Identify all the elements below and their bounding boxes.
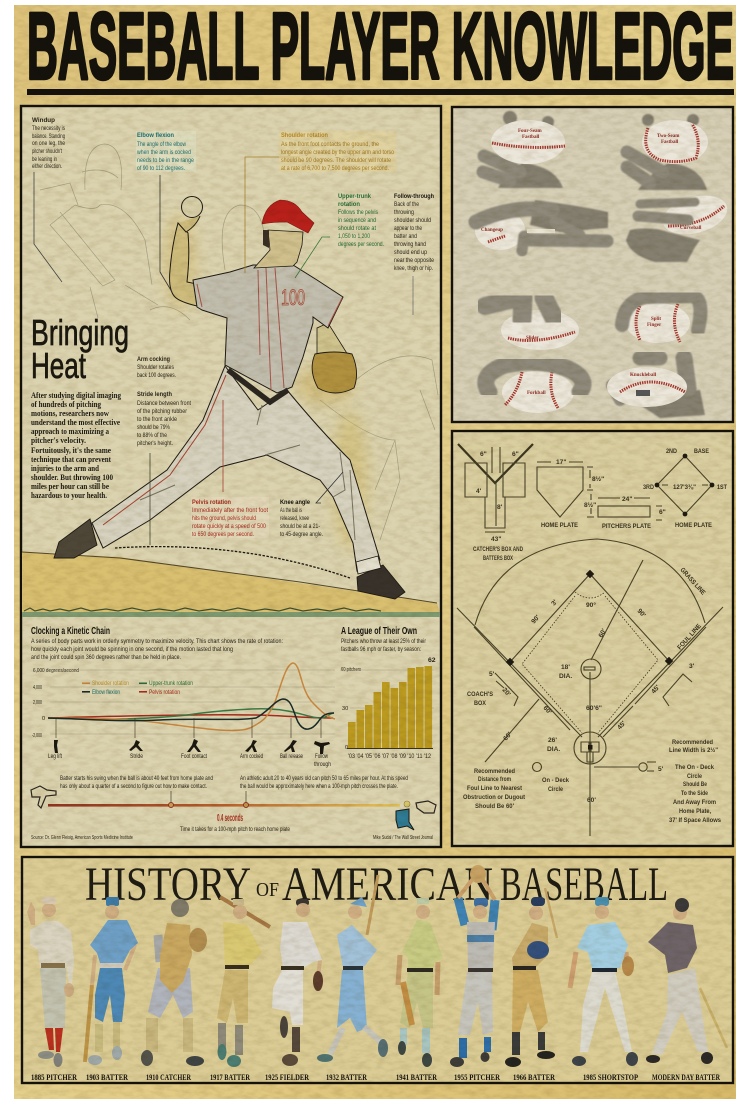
diagram: pitchers plate: 24" <box>622 496 632 503</box>
trouser folds and red stripe <box>103 375 226 525</box>
field labels: DIA. <box>547 746 560 753</box>
text: follow-through: batter and <box>394 233 417 240</box>
text: windup: on one leg, the <box>32 140 65 147</box>
field labels: 60' <box>502 731 514 742</box>
text: stride length: pitcher's height. <box>137 440 173 447</box>
chart heading: kinetic chain: how quickly each joint would be spinning in one second, if the motion lasted that long <box>31 646 233 653</box>
field labels: 90' <box>530 614 542 625</box>
diagram: base diamond <box>643 448 727 529</box>
text: batter timing note: Batter starts his swing when the ball is about 40 feet from home plate and <box>60 775 213 782</box>
foul lines <box>457 607 723 737</box>
shoe right <box>357 565 405 599</box>
grip: splitter: Split <box>651 317 661 322</box>
panel: bringing heat pitcher infographic <box>21 106 441 847</box>
player: 1903 batter <box>85 897 138 1065</box>
text: elbow flexion: of 90 to 112 degrees. <box>137 165 185 172</box>
text: follow-through: near the opposite <box>394 257 434 264</box>
heading: history of American baseball: BASEBALL <box>500 858 668 911</box>
text: follow-through: knee, thigh or hip. <box>394 265 433 272</box>
panel: pitch grip photographs <box>452 107 733 422</box>
grip: knuckleball: Knuckleball <box>630 373 657 378</box>
axis labels: 6,000 degrees/second <box>33 668 79 674</box>
player: 1955 pitcher <box>450 865 495 1067</box>
text: article intro: understand the most effective <box>31 417 120 427</box>
field labels: 60' <box>598 627 608 639</box>
player: 1885 pitcher <box>27 897 74 1067</box>
text: knee angle: released, knee <box>280 515 309 522</box>
player captions: 1903 BATTER <box>86 1073 128 1082</box>
text: knee angle: to 45-degree angle. <box>280 531 323 538</box>
note: on-deck circle: On - Deck <box>542 777 569 784</box>
player: 1925 fielder <box>272 899 323 1066</box>
callout: 0.4 seconds: 0.4 seconds <box>217 813 243 824</box>
text: article intro: approach to maximizing a <box>31 426 110 436</box>
text: elbow flexion: The angle of the elbow <box>137 141 186 148</box>
legend: Shoulder rotation <box>92 680 129 687</box>
back arm with ball <box>170 196 202 306</box>
bar chart: pitchers by season <box>340 657 436 760</box>
field labels: 60'6" <box>586 705 602 712</box>
text: article intro: injuries to the arm and <box>31 463 99 473</box>
diagram: home plate: HOME PLATE <box>541 522 579 529</box>
text: knee angle: should be at a 21- <box>280 523 320 530</box>
text: stride length: Distance between front <box>137 400 191 407</box>
text: stride length: of the pitching rubber <box>137 408 188 415</box>
callout: 0.4 seconds: Time it takes for a 100-mph pitch to reach home plate <box>180 826 290 833</box>
icons: pitching stages <box>54 739 330 754</box>
text: upper-trunk rotation: should rotate at <box>338 225 376 232</box>
bar chart: pitchers by season: 62 <box>428 657 436 664</box>
source credit: Source: Dr. Glenn Fleisig, American Sports Medicine Institute <box>31 835 133 841</box>
chart heading: kinetic chain: Clocking a Kinetic Chain <box>31 625 110 637</box>
field labels: 90' <box>636 608 647 619</box>
heading: history of American baseball: OF <box>256 879 279 901</box>
dashed infield <box>522 592 658 733</box>
text: shoulder rotation: As the front foot contacts the ground, the <box>281 141 379 148</box>
curve: elbow <box>48 699 334 729</box>
field labels: BOX <box>474 700 486 707</box>
text: knee angle: As the ball is <box>280 507 302 514</box>
text: shoulder rotation: Shoulder rotation <box>281 132 328 139</box>
note: recommended distance: Obstruction or Dugout <box>463 794 526 801</box>
text: arm cocking: Shoulder rotates <box>137 364 174 371</box>
field labels: 45' <box>616 720 628 731</box>
grip: four-seam fastball seams view: Two-Seam <box>657 134 680 139</box>
diagram: pitchers plate: PITCHERS PLATE <box>602 523 652 530</box>
grip: four-seam fastball seams view: Fastball <box>661 140 679 145</box>
player: 1941 batter <box>398 898 443 1067</box>
text: follow-through: Back of the <box>394 201 419 208</box>
text: windup: The necessity is <box>32 125 65 132</box>
heading: history of American baseball: HISTORY <box>85 858 251 911</box>
text: shoulder rotation <box>279 131 396 172</box>
field labels: 3' <box>550 598 559 607</box>
graphics credit: Mike Sudal / The Wall Street Journal <box>373 835 433 841</box>
watercolour halo <box>164 214 368 550</box>
field labels: DIA. <box>559 673 572 680</box>
grip: splitter: Finger <box>647 323 662 328</box>
note: on-deck placement: 37' If Space Allows <box>669 817 721 824</box>
field labels: 90° <box>586 601 596 609</box>
grip: four-seam fastball top: Four-Seam <box>518 129 543 134</box>
player: 1932 batter <box>317 875 388 1062</box>
text: arm cocking: back 100 degrees. <box>137 372 176 379</box>
note: on-deck placement: Should Be <box>683 781 707 788</box>
text: windup: pitcher shouldn't <box>32 148 62 155</box>
diagram: catcher's box and batters box: 43" <box>491 536 501 543</box>
curve: upper trunk <box>48 709 334 719</box>
axis labels: -2,000 <box>32 733 42 739</box>
diagram: pitchers plate: 6" <box>659 509 666 516</box>
text: elbow flexion: when the arm is cocked <box>136 149 191 156</box>
player captions: 1885 PITCHER <box>31 1073 77 1082</box>
text: article intro: pitcher's velocity. <box>31 435 86 445</box>
player captions: 1955 PITCHER <box>454 1073 500 1082</box>
field labels: GRASS LINE <box>679 567 707 597</box>
recommended distance line <box>485 699 539 762</box>
text: elbow flexion <box>136 131 196 172</box>
legend: Pelvis rotation <box>149 689 180 696</box>
field labels: 5' <box>658 766 664 773</box>
text: upper-trunk rotation: Upper-trunk <box>338 193 371 200</box>
legend <box>82 680 193 696</box>
text: stride length: to 88% of the <box>137 432 167 439</box>
note: recommended distance: Should Be 60' <box>475 803 514 810</box>
note: on-deck placement: And Away From <box>673 799 716 806</box>
diagram: catcher's box and batters box: 4' <box>476 488 482 495</box>
home plate circle <box>574 732 606 764</box>
player: modern day batter <box>646 898 727 1064</box>
event markers <box>56 718 321 738</box>
event labels: Ball release <box>280 753 303 760</box>
player: 1910 catcher <box>141 899 207 1066</box>
ground: pitching mound <box>22 552 440 617</box>
diagram: home plate <box>537 459 604 529</box>
diagram: base diamond: BASE <box>694 448 709 455</box>
note: recommended distance: Recommended <box>474 768 515 775</box>
event labels: Arm cocked <box>240 753 263 760</box>
diagram: base diamond: 127'3⅜" <box>673 484 696 491</box>
text: arm cocking <box>137 356 176 379</box>
event labels <box>48 753 331 768</box>
text: article intro: motions, researchers now <box>31 408 110 418</box>
text: windup <box>32 117 65 170</box>
axis labels: 0 <box>42 716 45 722</box>
note: recommended distance: Foul Line to Nearest <box>467 785 523 792</box>
bar chart: pitchers by season: '03 '04 '05 '06 '07 '08 '09 '10 '11 '12 <box>348 753 431 760</box>
text: follow-through <box>394 193 434 272</box>
diagram: catcher's box and batters box: 6" <box>480 451 487 458</box>
grip: slider: Slider <box>526 336 540 341</box>
leading leg and trousers <box>92 366 380 571</box>
text: windup: either direction. <box>32 163 62 170</box>
coach boxes <box>495 673 692 706</box>
text: article intro: hazardous to your health. <box>31 490 107 500</box>
grip: curveball: Curveball <box>680 226 702 231</box>
bar chart: pitchers by season: 30 <box>342 706 348 712</box>
player captions: 1932 BATTER <box>326 1073 367 1082</box>
heading: history of American baseball: AMERICAN <box>282 858 493 911</box>
text: pelvis rotation: Immediately after the front foot <box>192 507 268 514</box>
text: follow-through: throwing <box>394 209 414 216</box>
text: article intro: Fortuitously, it's the same <box>31 445 111 455</box>
field labels: 60' <box>542 705 553 716</box>
bases <box>506 570 673 750</box>
title rule <box>27 89 734 95</box>
event labels: Follow <box>315 753 328 760</box>
grip: slider <box>485 298 579 350</box>
text: follow-through: should end up <box>394 249 427 256</box>
text: upper-trunk rotation: rotation <box>338 201 360 208</box>
text: article intro: After studying digital imaging <box>31 390 122 400</box>
text: stride length: Stride length <box>137 391 172 398</box>
grip: forkball: Forkball <box>527 391 546 396</box>
diagram: baseball field <box>457 539 723 836</box>
text: upper-trunk rotation: 1,050 to 1,200 <box>338 233 370 240</box>
diagram: home plate: 8½" <box>584 501 596 509</box>
chart heading: league of their own: fastballs 96 mph or faster, by season: <box>341 646 421 653</box>
text: arm cocking: Arm cocking <box>137 356 170 363</box>
player captions: 1985 SHORTSTOP <box>583 1073 638 1082</box>
field labels: 60' <box>587 797 596 804</box>
grip: four-seam fastball top <box>483 111 565 188</box>
player captions: 1910 CATCHER <box>146 1073 191 1082</box>
text: adult pitch note: the ball would be approximately here when a 100-mph pitch crosses the plate. <box>240 783 398 790</box>
grid lines <box>50 670 335 734</box>
note: line width: Line Width is 2½" <box>669 746 718 754</box>
grip: knuckleball <box>607 358 705 418</box>
text: stride length: should be 79% <box>137 424 170 431</box>
diagram: base diamond: 2ND <box>666 448 677 455</box>
text: pelvis rotation: to 650 degrees per second. <box>192 531 254 538</box>
player captions: 1966 BATTER <box>513 1073 555 1082</box>
chart heading: kinetic chain: and the joint could spin 360 degrees rather than be held in place. <box>31 654 181 661</box>
jersey number: 100 <box>281 285 305 310</box>
text: shoulder rotation: should be 90 degrees. The shoulder will rotate <box>281 157 391 164</box>
diagram: catcher's box and batters box: CATCHER'S BOX AND <box>473 546 523 553</box>
event labels: Stride <box>130 753 143 760</box>
text: article intro: technique that can prevent <box>31 454 111 464</box>
illustration: pitcher <box>54 196 405 599</box>
sketch: ghosted windup and follow-through figures <box>40 144 438 540</box>
grip: changeup <box>475 200 608 251</box>
text: knee angle: Knee angle <box>280 499 310 506</box>
player captions: 1941 BATTER <box>396 1073 437 1082</box>
grip: four-seam fastball seams view <box>627 114 708 190</box>
text: shoulder rotation: longest angle created by the upper arm and torso <box>281 149 394 156</box>
note: on-deck circle <box>542 777 569 793</box>
event labels: through <box>314 761 331 768</box>
text: follow-through: throwing hand <box>394 241 426 248</box>
heading: Bringing Heat <box>31 312 129 386</box>
note: recommended distance: Distance from <box>478 776 511 783</box>
player captions: 1917 BATTER <box>210 1073 250 1082</box>
axis labels: 2,000 <box>33 700 42 706</box>
glove <box>312 352 357 393</box>
text: stride length <box>137 391 191 447</box>
timeline: ball flight to home plate <box>31 786 436 830</box>
curve: pelvis <box>48 715 333 718</box>
text: windup: Windup <box>32 117 55 124</box>
note: on-deck placement: Home Plate, <box>679 808 711 815</box>
diagram: home plate: 17" <box>556 459 566 466</box>
chart heading: league of their own: A League of Their Own <box>341 625 417 637</box>
base paths <box>510 574 669 662</box>
grip: curveball <box>626 189 732 262</box>
text: upper-trunk rotation: Follows the pelvis <box>338 209 378 216</box>
diagram: base diamond: 1ST <box>717 484 727 491</box>
diagram: catcher's box and batters box: 8' <box>497 504 503 511</box>
text: stride length: to the front ankle <box>137 416 177 423</box>
event labels: Leg lift <box>48 753 62 760</box>
text: article intro: of hundreds of pitching <box>31 399 102 409</box>
player captions: 1925 FIELDER <box>265 1073 309 1082</box>
chart heading: league of their own <box>341 625 427 653</box>
note: on-deck placement: Circle <box>687 773 702 780</box>
text: elbow flexion: needs to be in the range <box>137 157 194 164</box>
grip: splitter <box>622 296 700 343</box>
bar chart: pitchers by season: 60 pitchers <box>341 667 361 673</box>
text: knee angle <box>280 499 323 538</box>
diagram: catcher's box and batters box: BATTERS BOX <box>483 555 513 562</box>
text: follow-through: shoulder should <box>394 217 431 224</box>
chart heading: kinetic chain: A series of body parts work in orderly symmetry to maximize velocity. This chart shows the rate of rotation: <box>31 638 283 645</box>
jersey stripes and sleeve trim <box>197 268 342 390</box>
text: pelvis rotation: rotate quickly at a speed of 500 <box>192 523 266 530</box>
field labels: 45' <box>650 684 662 695</box>
player captions: MODERN DAY BATTER <box>652 1073 720 1082</box>
note: on-deck placement: To the Side <box>681 790 708 797</box>
pitching circle and centre lines <box>581 659 601 679</box>
field labels: 20' <box>501 687 512 698</box>
icon: catcher <box>416 801 436 813</box>
field labels: 18' <box>561 664 570 671</box>
text: shoulder rotation: at a rate of 6,700 to 7,500 degrees per second. <box>281 165 389 172</box>
head <box>254 200 314 268</box>
panel: history of American baseball <box>22 857 733 1083</box>
diagram: home plate: 8½" <box>592 475 604 483</box>
field labels: 3' <box>689 663 695 670</box>
note: recommended distance <box>463 768 526 810</box>
note: line width: Recommended <box>672 739 713 746</box>
text: article intro: miles per hour can still be <box>31 481 109 491</box>
diagram: catcher's box and batters box: 6" <box>512 451 519 458</box>
heading: Bringing Heat: Bringing <box>31 312 129 353</box>
jersey <box>193 265 343 393</box>
legend: Elbow flexion <box>92 689 120 696</box>
legend: Upper-trunk rotation <box>149 680 193 687</box>
text: elbow flexion: Elbow flexion <box>137 132 174 139</box>
diagram: catcher's box and batters box <box>458 444 533 562</box>
text: upper-trunk rotation: degrees per second. <box>338 241 384 248</box>
stride arrow <box>115 547 350 578</box>
heading: history of American baseball <box>85 858 668 911</box>
text: article intro <box>31 390 122 500</box>
diagram: pitchers plate <box>598 496 666 530</box>
field labels <box>467 567 707 804</box>
event labels: Foot contact <box>181 753 207 760</box>
line chart: rotation rates through the pitch <box>32 663 335 768</box>
annotation leader lines <box>34 157 413 545</box>
chart heading: league of their own: Pitchers who throw at least 25% of their <box>341 638 427 645</box>
note: line width <box>669 739 718 754</box>
text: pelvis rotation <box>191 497 269 538</box>
text: upper-trunk rotation <box>338 193 384 248</box>
panel: field dimension diagrams <box>452 431 733 846</box>
diagram: base diamond: 3RD <box>643 484 654 491</box>
text: pelvis rotation: hits the ground, pelvis should <box>192 515 256 522</box>
chart heading: kinetic chain <box>31 625 283 661</box>
axis labels <box>32 668 79 739</box>
axis labels: 4,000 <box>33 685 42 691</box>
text: follow-through: Follow-through <box>394 193 434 200</box>
icon: batter <box>396 809 414 830</box>
text: adult pitch note <box>240 775 408 790</box>
diagram: base diamond: HOME PLATE <box>675 522 713 529</box>
glove arm <box>317 323 353 363</box>
grass arc <box>475 539 705 625</box>
field labels: FOUL LINE <box>676 622 703 651</box>
note: on-deck circle: Circle <box>548 786 563 793</box>
text: adult pitch note: An athletic adult 20 to 40 years old can pitch 50 to 65 miles per hour. At this speed <box>240 775 408 782</box>
heading: Bringing Heat: Heat <box>31 345 86 386</box>
text: windup: balance. Standing <box>32 133 65 140</box>
bar chart: pitchers by season: 0 <box>345 745 348 751</box>
curve: shoulder <box>48 663 335 731</box>
field labels: 5' <box>489 671 495 678</box>
icon: pitcher <box>31 786 56 808</box>
field labels: 26' <box>548 737 557 744</box>
grip: forkball <box>486 362 583 413</box>
grip: four-seam fastball top: Fastball <box>522 135 540 140</box>
grip: changeup: Changeup <box>481 228 503 233</box>
text: upper-trunk rotation: in sequence and <box>338 217 376 224</box>
text: windup: be leaning in <box>32 156 57 163</box>
text: batter timing note <box>60 775 213 790</box>
text: follow-through: appear to the <box>394 225 422 232</box>
callout: 0.4 seconds <box>180 813 290 833</box>
field labels: COACH'S <box>467 691 494 698</box>
shoe left <box>54 519 97 558</box>
sock cuff <box>356 556 381 574</box>
on-deck circles <box>532 762 542 772</box>
text: pelvis rotation: Pelvis rotation <box>192 499 231 506</box>
note: on-deck placement <box>669 764 721 824</box>
player: 1985 shortstop <box>570 897 638 1066</box>
text: batter timing note: has only about a quarter of a second to figure out how to make contact. <box>60 783 207 790</box>
player: 1966 batter <box>505 888 557 1067</box>
belt <box>228 370 288 402</box>
text: article intro: shoulder. But throwing 100 <box>31 472 113 482</box>
note: on-deck placement: The On - Deck <box>675 764 714 771</box>
player captions <box>31 1073 720 1082</box>
player: 1917 batter <box>217 897 270 1067</box>
